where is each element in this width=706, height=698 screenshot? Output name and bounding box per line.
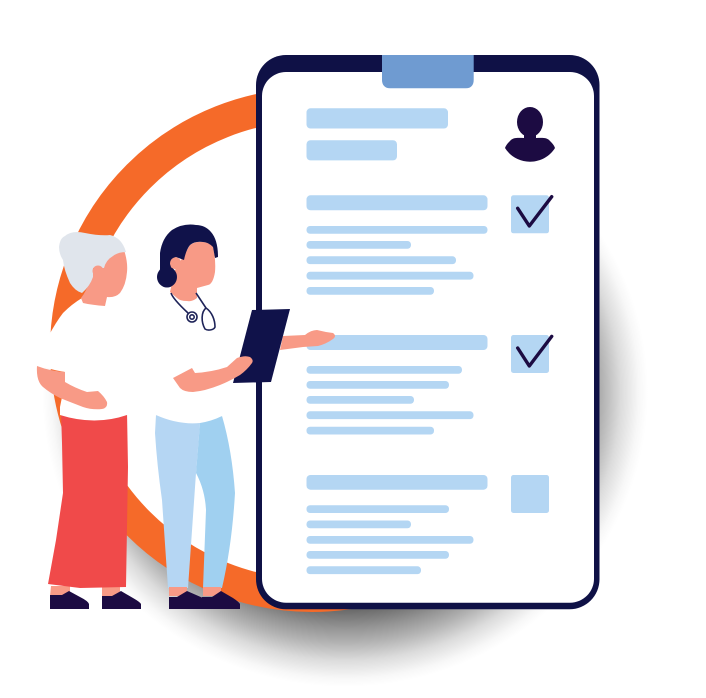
woman face and neck — [81, 250, 127, 306]
doctor shoes — [169, 591, 240, 609]
doctor left leg — [155, 415, 200, 588]
woman shirt — [35, 298, 160, 420]
woman ear — [92, 266, 104, 276]
clipboard frame — [256, 55, 600, 609]
icon: user avatar — [505, 107, 555, 162]
woman shoes — [50, 591, 141, 609]
figure: older woman — [35, 232, 160, 609]
name placeholders — [306, 108, 448, 160]
clipboard paper — [262, 72, 594, 603]
tablet clipboard — [233, 309, 290, 383]
woman arm — [37, 366, 107, 409]
orange ring — [66, 104, 558, 596]
doctor neck and face — [170, 242, 215, 301]
doctor far arm — [280, 330, 335, 350]
checklist item 2 — [306, 335, 488, 434]
doctor right leg — [196, 416, 235, 588]
doctor ear — [169, 257, 181, 269]
woman ankles — [50, 586, 120, 596]
checklist item 3 — [306, 475, 488, 574]
doctor shirt — [156, 296, 232, 422]
clipboard — [256, 55, 600, 609]
doctor near arm — [173, 356, 253, 392]
drop shadow — [42, 97, 648, 687]
doctor hair bun — [157, 266, 177, 288]
doctor hair — [160, 225, 218, 276]
checkbox 3 empty — [511, 475, 549, 513]
doctor ankles — [169, 587, 221, 596]
woman skirt — [48, 412, 128, 588]
clipboard clip — [382, 55, 474, 88]
checkbox 2 checked — [511, 335, 552, 373]
woman hair — [59, 232, 126, 293]
stethoscope — [171, 293, 215, 330]
figure: doctor — [155, 225, 335, 609]
checkbox 1 checked — [511, 195, 552, 233]
checklist item 1 — [306, 195, 488, 295]
